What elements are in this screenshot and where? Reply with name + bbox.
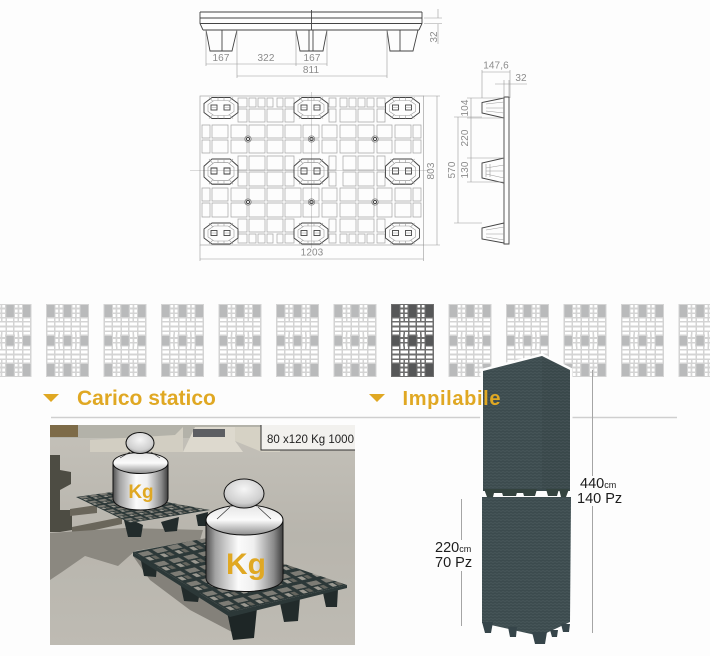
triangle marker: carico statico (43, 394, 59, 402)
small weight: Kg (128, 482, 154, 503)
stacked pallet tower (482, 356, 571, 644)
technical drawing: side view (447, 60, 527, 244)
technical drawing: front elevation (200, 9, 442, 78)
dimension chain 104 220 130: 130 (460, 161, 471, 178)
bottom feet (482, 622, 570, 644)
heading: carico statico: Carico statico (77, 387, 216, 410)
width dimensions: 322 (258, 53, 275, 64)
large weight (206, 479, 283, 592)
height marker: 220 cm (435, 499, 472, 626)
height marker: 220 cm: 70 Pz (435, 555, 472, 571)
highlighted pallet (391, 304, 434, 377)
dimension 32: 32 (515, 73, 527, 84)
dimension 1203 (200, 245, 424, 261)
dimension 570: 570 (447, 161, 458, 178)
dimension 803 (423, 96, 440, 245)
deck cells (202, 98, 421, 243)
dimension 32 (495, 73, 527, 97)
photo label box (261, 425, 355, 450)
lower stack (482, 497, 571, 636)
large weight: Kg (226, 548, 266, 581)
height marker: 440 cm: 140 Pz (577, 491, 622, 507)
dimension chain 104 220 130 (460, 98, 504, 182)
dimension 147.6 (482, 60, 510, 98)
heading: impilabile: Impilabile (402, 388, 500, 410)
far pallet shadow (50, 528, 203, 580)
triangle marker: impilabile (369, 394, 385, 402)
dimension 147.6: 147,6 (483, 60, 509, 72)
pallet outline (200, 96, 424, 245)
height dimension 32: 32 (429, 31, 440, 43)
yard ground (50, 425, 355, 645)
near pallet shadow (133, 556, 232, 632)
feet (206, 30, 418, 51)
width dimensions: 167 (212, 53, 230, 64)
height marker: 440 cm: 440cm (580, 476, 616, 492)
centre lines (190, 92, 430, 248)
width dimensions (206, 30, 387, 78)
background buildings (50, 425, 280, 452)
section rule (51, 416, 677, 418)
small weight (113, 432, 168, 510)
tower halo (482, 356, 570, 636)
technical drawing: plan view (190, 92, 440, 261)
feet (204, 98, 420, 244)
height marker: 220 cm: 220cm (435, 540, 471, 556)
photo label box: 80 x120 Kg 1000 (267, 434, 354, 446)
drain holes (245, 136, 378, 205)
dimension chain 104 220 130: 220 (460, 129, 471, 146)
pallet strip (0, 304, 710, 377)
width dimensions: 167 (304, 53, 321, 64)
connecting feet (483, 489, 570, 497)
near pallet (133, 538, 347, 640)
dimension 570 (447, 117, 482, 223)
side feet (482, 98, 504, 243)
dimension chain 104 220 130: 104 (460, 99, 471, 116)
height marker: 440 cm (577, 370, 622, 633)
side plate (504, 97, 509, 244)
width dimensions: 811 (303, 65, 319, 76)
photo: static load on pallets (50, 425, 355, 645)
height dimension 32 (424, 9, 442, 44)
forklift (50, 455, 122, 532)
deck plate (200, 10, 422, 30)
upper stack (483, 356, 570, 489)
dimension 803: 803 (426, 162, 437, 180)
dimension 1203: 1203 (301, 248, 324, 258)
far pallet (76, 492, 210, 537)
